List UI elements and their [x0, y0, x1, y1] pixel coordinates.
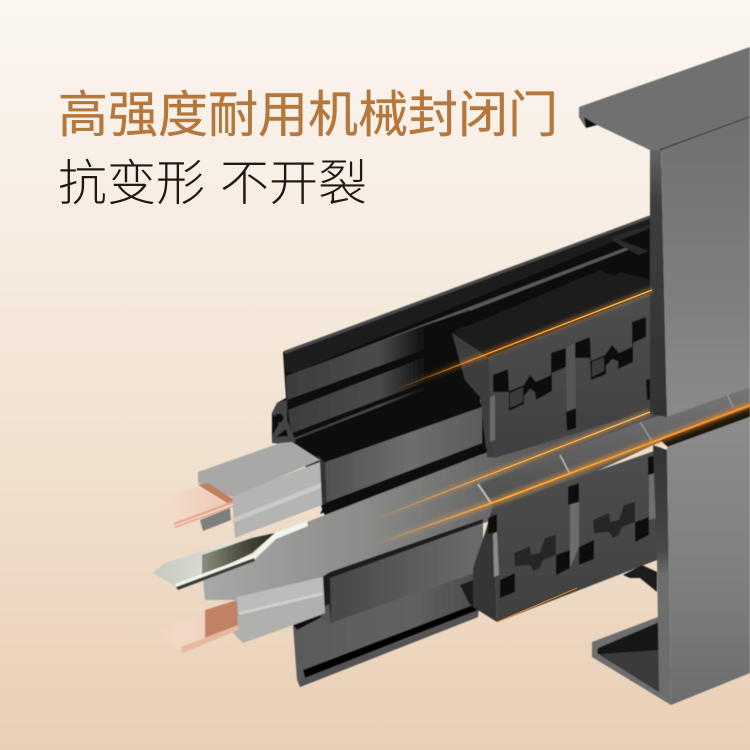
back struts	[455, 224, 651, 345]
upper black conductor block	[297, 393, 488, 514]
left teeth	[500, 535, 570, 598]
lower module block	[473, 450, 657, 622]
silver centre blade	[153, 521, 308, 590]
segmented sleeve with joints	[478, 387, 750, 507]
lower-right beam	[592, 417, 750, 705]
product assembly	[147, 47, 750, 705]
subtitle: 抗变形 不开裂	[58, 157, 367, 211]
lower channel	[293, 565, 483, 687]
lower insulator and copper	[153, 577, 325, 653]
upper module block	[452, 270, 652, 458]
title: 高强度耐用机械封闭门	[58, 87, 558, 143]
top-right beam	[579, 47, 750, 417]
right teeth	[579, 502, 649, 565]
orange light streaks	[373, 290, 750, 622]
upper insulator and copper	[147, 442, 322, 538]
lower black conductor block	[317, 519, 483, 624]
upper rail housing	[272, 215, 651, 516]
middle bar	[203, 390, 750, 600]
